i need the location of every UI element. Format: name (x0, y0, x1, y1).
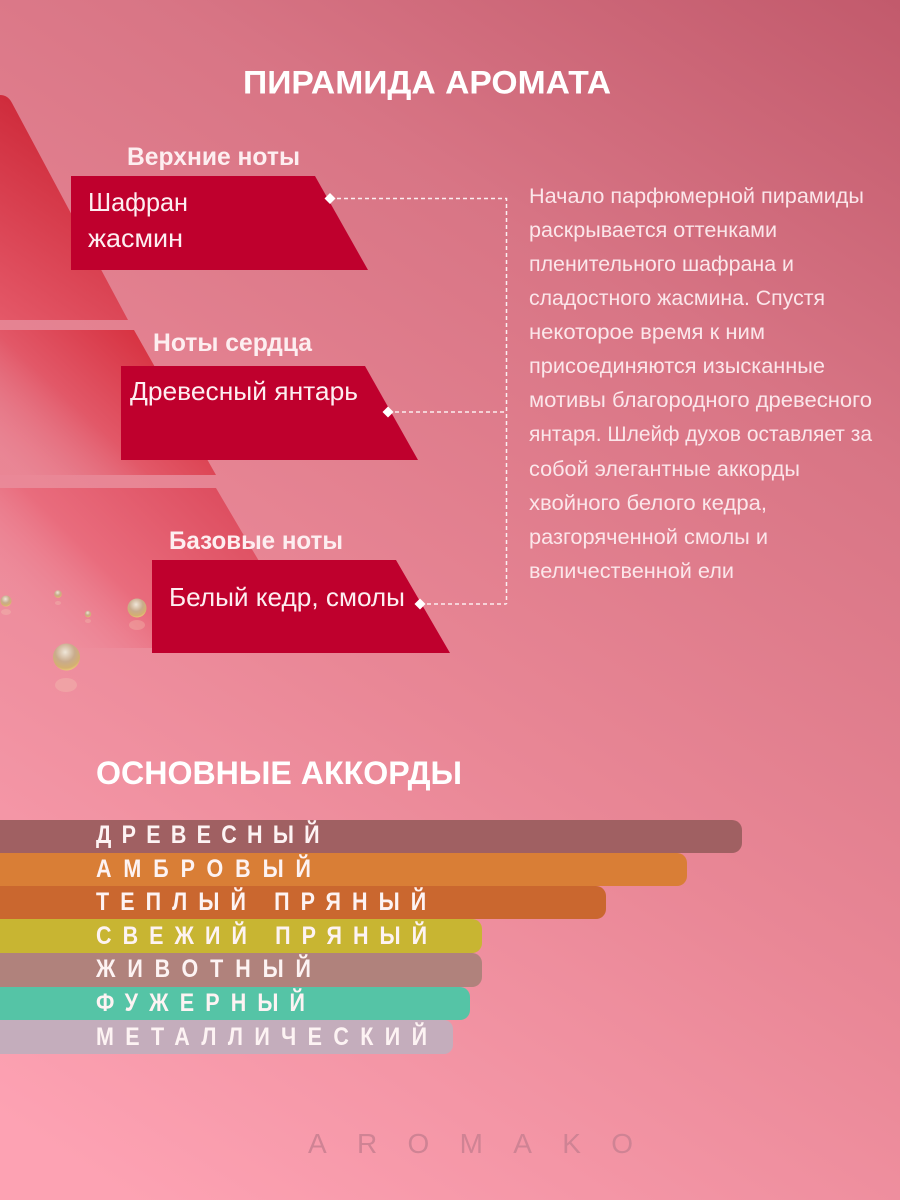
pyramid base tier (0, 488, 310, 648)
bar: metallic: МЕТАЛЛИЧЕСКИЙ (96, 1021, 427, 1050)
top notes box (71, 176, 368, 270)
pearl reflections (1, 601, 145, 692)
description text: сладостного жасмина. Спустя (529, 287, 825, 310)
connector lines (324, 193, 506, 610)
description text: величественной ели (529, 560, 734, 583)
bar: fresh spicy (0, 919, 482, 953)
bar: animal (0, 953, 482, 987)
top notes text: Шафран (88, 187, 188, 217)
large pearl (53, 644, 80, 670)
bar: amber: АМБРОВЫЙ (96, 853, 311, 882)
description text: пленительного шафрана и (529, 253, 794, 276)
top notes heading: Верхние ноты (127, 143, 300, 171)
description text (529, 185, 872, 583)
description text: раскрывается оттенками (529, 219, 777, 242)
bar: metallic (0, 1020, 453, 1054)
description text: янтаря. Шлейф духов оставляет за (529, 423, 872, 446)
accords heading: ОСНОВНЫЕ АККОРДЫ (96, 755, 462, 791)
top notes text (88, 187, 188, 253)
pyramid middle tier (0, 330, 216, 475)
bar: fougere (0, 987, 470, 1020)
bar: animal: ЖИВОТНЫЙ (95, 953, 311, 982)
description text: присоединяются изысканные (529, 355, 825, 378)
accords bar chart (0, 819, 742, 1054)
description text: Начало парфюмерной пирамиды (529, 185, 864, 208)
connector marker top (324, 193, 336, 204)
pyramid illustration (0, 95, 310, 648)
bar: amber (0, 853, 687, 886)
base notes box (152, 560, 450, 653)
heart notes text: Древесный янтарь (130, 376, 358, 406)
description text: хвойного белого кедра, (529, 492, 767, 515)
description text: мотивы благородного древесного (529, 389, 872, 412)
bar: fougere: ФУЖЕРНЫЙ (96, 987, 305, 1016)
panel: base notes (152, 527, 450, 653)
heart notes box (121, 366, 418, 460)
panel: heart notes (121, 329, 418, 460)
brand name: AROMAKO (308, 1128, 633, 1159)
base notes text: Белый кедр, смолы (169, 582, 405, 612)
small pearl (54, 590, 62, 598)
connector marker base (414, 598, 426, 610)
pyramid top tier (0, 95, 128, 320)
bar: woody (0, 819, 742, 853)
panel: top notes (71, 143, 368, 270)
pearls (0, 590, 146, 692)
base notes heading: Базовые ноты (169, 527, 343, 555)
connector marker middle (382, 406, 394, 418)
top notes text: жасмин (88, 223, 183, 253)
description text: собой элегантные аккорды (529, 458, 800, 481)
bar: fresh spicy: СВЕЖИЙ ПРЯНЫЙ (96, 920, 427, 949)
bar: woody: ДРЕВЕСНЫЙ (96, 819, 320, 848)
title: ПИРАМИДА АРОМАТА (243, 64, 611, 100)
medium pearl (128, 598, 146, 618)
description text: некоторое время к ним (529, 321, 765, 344)
bar: warm spicy: ТЕПЛЫЙ ПРЯНЫЙ (96, 886, 426, 915)
small pearl (85, 611, 91, 617)
description text: разгоряченной смолы и (529, 526, 768, 549)
heart notes heading: Ноты сердца (153, 329, 313, 357)
small pearl (0, 596, 12, 606)
bar: warm spicy (0, 886, 606, 919)
